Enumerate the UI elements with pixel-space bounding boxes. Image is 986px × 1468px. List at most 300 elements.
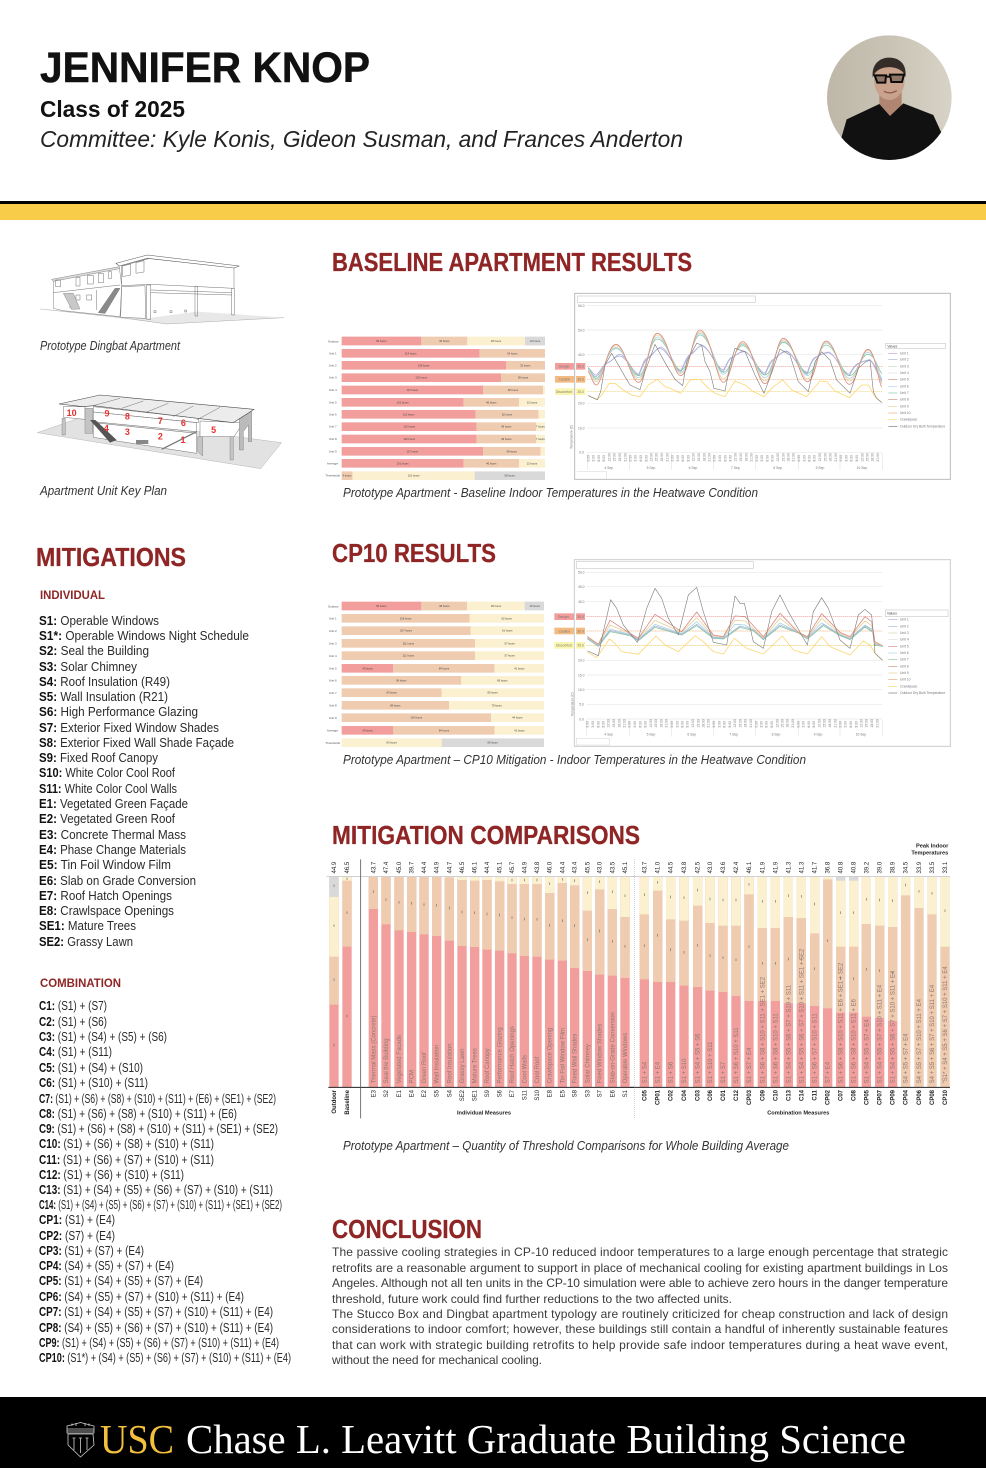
chart: CP10 hours by threshold bars: 43 hours bbox=[362, 666, 374, 670]
x axis time labels: 0:00 bbox=[586, 721, 590, 728]
unit numbers: 6 bbox=[181, 418, 186, 428]
measure combinations inside bars: "S1* + S4 + S5 + S6 + S7 + S10 + S11 + E4 bbox=[943, 966, 949, 1083]
combination codes below axis: CP01 bbox=[656, 1089, 662, 1105]
chart: baseline hours by threshold bars: 54 hours bbox=[507, 351, 518, 355]
series legend: Values bbox=[887, 344, 898, 348]
x axis time labels: 3:00 bbox=[802, 455, 806, 462]
chart: baseline hours by threshold bars: 16 hours bbox=[530, 339, 541, 343]
chart: CP10 hours by threshold bars: 38 hours bbox=[439, 604, 450, 608]
x axis time labels: 6:00 bbox=[723, 455, 727, 462]
peak indoor temperature values: 43.0 bbox=[708, 861, 714, 873]
chart: CP10 hours by threshold bars: Unit 6 bbox=[329, 679, 337, 683]
peak indoor temperature values: 45.1 bbox=[498, 861, 504, 873]
chart: baseline hours by threshold bars: 46 hours bbox=[486, 461, 497, 465]
chart: CP10 hours by threshold bars: 85 hours bbox=[487, 741, 499, 745]
chart: CP10 hours by threshold bars: 84 hours bbox=[439, 728, 450, 732]
y axis labels: 40.0 bbox=[578, 353, 585, 357]
combination codes below axis: C01 bbox=[721, 1089, 727, 1101]
x axis time labels: 15:00 bbox=[696, 719, 700, 728]
series legend: Unit 1 bbox=[900, 351, 909, 355]
combination codes below axis: C14 bbox=[799, 1089, 805, 1101]
peak indoor temperature values: 44.4 bbox=[422, 861, 428, 873]
series legend: Crawlspace bbox=[900, 684, 918, 688]
x axis time labels: 9:00 bbox=[771, 455, 775, 462]
x axis time labels: 9 Sep bbox=[814, 732, 823, 736]
bar codes below axis: Baseline bbox=[345, 1089, 351, 1115]
list: combination mitigations: CP9: (S1) + (S4) + (S5) + (S6) + (S7) + (S10) + (S11) + (E4) bbox=[39, 1336, 279, 1350]
x axis time labels: 21:00 bbox=[623, 453, 627, 462]
measure combinations inside bars: S4 + S5 + S6 + S7 + S10 + S11 + E4 bbox=[930, 984, 936, 1083]
chart: baseline hours by threshold bars: 112 hours bbox=[404, 425, 416, 429]
chart: baseline hours by threshold bars: 136 hours bbox=[418, 363, 430, 367]
x axis time labels: 4 Sep bbox=[604, 732, 613, 736]
y axis labels: 60.0 bbox=[578, 304, 585, 308]
list: individual mitigations: S9: Fixed Roof Canopy bbox=[39, 751, 159, 765]
x axis time labels: 12:00 bbox=[860, 453, 864, 462]
x axis time labels: 9:00 bbox=[854, 721, 858, 728]
x axis time labels: 0:00 bbox=[586, 455, 590, 462]
chart: CP10 hours by threshold bars: Unit 9 bbox=[329, 716, 337, 720]
x axis time labels: 9:00 bbox=[686, 721, 690, 728]
chart: CP10 hours by threshold bars: Unit 1 bbox=[329, 617, 337, 621]
heading: CP10 results: CP10 RESULTS bbox=[332, 538, 496, 568]
series legend: Unit 3 bbox=[900, 364, 909, 368]
x axis time labels: 6 Sep bbox=[689, 466, 698, 470]
x axis time labels: 6:00 bbox=[596, 721, 600, 728]
x axis time labels: 0:00 bbox=[671, 455, 675, 462]
measure names inside bars: Cool Roof bbox=[535, 1056, 541, 1083]
y axis labels: 10.0 bbox=[578, 426, 585, 430]
threshold legend boxes: 25.0 bbox=[577, 390, 584, 394]
x axis time labels: 6:00 bbox=[807, 721, 811, 728]
combination codes below axis: CP07 bbox=[878, 1089, 884, 1105]
y axis labels: 15.0 bbox=[578, 673, 585, 677]
x axis time labels: 12:00 bbox=[818, 453, 822, 462]
peak indoor temperature values: 44.4 bbox=[485, 861, 491, 873]
list: combination mitigations: CP6: (S4) + (S5) + (S7) + (S10) + (S11) + (E4) bbox=[39, 1290, 244, 1304]
measure names inside bars bbox=[371, 1012, 629, 1083]
chart: CP10 hours by threshold bars: 41 hours bbox=[514, 728, 525, 732]
measure names inside bars: Roof Insulation bbox=[447, 1043, 453, 1083]
x axis time labels: 12:00 bbox=[692, 453, 696, 462]
series legend: Unit 8 bbox=[900, 664, 909, 668]
series legend: Unit 2 bbox=[900, 624, 909, 628]
bar codes below axis: E5 bbox=[560, 1089, 566, 1097]
threshold lines bbox=[587, 616, 882, 646]
bar codes below axis: E7 bbox=[510, 1089, 516, 1097]
list: individual mitigations: S5: Wall Insulation (R21) bbox=[39, 690, 168, 704]
threshold legend boxes: 30.0 bbox=[577, 629, 584, 633]
text block: conclusion bbox=[331, 1245, 948, 1367]
x axis time labels: 6:00 bbox=[765, 455, 769, 462]
text block: conclusion: The Stucco Box and Dingbat apartment typology are routinely criticized for cheap construction and lack of design bbox=[332, 1307, 948, 1321]
x axis time labels: 18:00 bbox=[744, 719, 748, 728]
y axis labels: 40.0 bbox=[578, 600, 585, 604]
chart: CP10 hours by threshold bars: Unit 4 bbox=[329, 654, 337, 658]
peak indoor temperature values bbox=[642, 861, 949, 873]
threshold legend boxes: Danger bbox=[559, 365, 570, 369]
x axis time labels: 0:00 bbox=[628, 721, 632, 728]
combination codes below axis: C04 bbox=[682, 1089, 688, 1101]
combination codes below axis: CP05 bbox=[864, 1089, 870, 1105]
x axis time labels: 18:00 bbox=[786, 719, 790, 728]
axis group title: combination measures: Combination Measures bbox=[767, 1110, 829, 1116]
x axis time labels: 9:00 bbox=[812, 721, 816, 728]
x axis time labels bbox=[586, 453, 882, 470]
chart: CP10 hours by threshold bars: 111 hours bbox=[403, 654, 415, 658]
text block: conclusion: retrofits are a reasonable argument to support in place of mechanical cooling for existing apartment buildings in Los bbox=[332, 1261, 948, 1275]
bar codes below axis: E3 bbox=[371, 1089, 377, 1097]
chart: CP10 hours by threshold bars: 41 hours bbox=[514, 666, 525, 670]
x axis time labels: 5 Sep bbox=[647, 732, 656, 736]
unit numbers: 10 bbox=[67, 408, 77, 418]
x axis time labels: 6:00 bbox=[808, 455, 812, 462]
list: combination mitigations: C10: (S1) + (S6) + (S8) + (S10) + (S11) bbox=[39, 1137, 214, 1151]
list: combination mitigations: C7: (S1) + (S6) + (S8) + (S10) + (S11) + (E6) + (SE1) + (SE2) bbox=[39, 1092, 276, 1106]
combination codes below axis: C05 bbox=[642, 1089, 648, 1101]
subheading: combination: COMBINATION bbox=[40, 976, 121, 990]
list: combination mitigations bbox=[39, 999, 291, 1365]
chart: CP10 hours by threshold bars: 83 hours bbox=[386, 741, 398, 745]
text block: conclusion: threshold, future work could find further reductions to the two affected units. bbox=[332, 1292, 732, 1306]
threshold legend boxes: 35.0 bbox=[577, 615, 584, 619]
peak indoor temperature values: 42.5 bbox=[696, 861, 702, 873]
chart: CP10 hours by threshold bars: 83 hours bbox=[386, 691, 398, 695]
series legend: Unit 8 bbox=[900, 398, 909, 402]
threshold legend boxes: Discomfort bbox=[556, 644, 572, 648]
combination codes below axis: CP09 bbox=[891, 1089, 897, 1105]
list: individual mitigations: E7: Roof Hatch Openings bbox=[39, 889, 172, 903]
y axis labels bbox=[570, 571, 585, 721]
series legend: Unit 10 bbox=[900, 678, 911, 682]
peak indoor temperature values: 45.5 bbox=[585, 861, 591, 873]
list: combination mitigations: C8: (S1) + (S6) + (S8) + (S10) + (S11) + (E6) bbox=[39, 1107, 237, 1121]
chart: CP10 hours by threshold bars: 16 hours bbox=[529, 604, 541, 608]
bar codes below axis: E8 bbox=[548, 1089, 554, 1097]
series legend: Unit 5 bbox=[900, 378, 909, 382]
x axis time labels: 12:00 bbox=[776, 453, 780, 462]
x axis time labels: 12:00 bbox=[817, 719, 821, 728]
combination codes below axis: C13 bbox=[786, 1089, 792, 1101]
x axis time labels: 10 Sep bbox=[857, 466, 867, 470]
combination codes below axis: C03 bbox=[696, 1089, 702, 1101]
x axis time labels: 21:00 bbox=[833, 719, 837, 728]
bar codes below axis: S6 bbox=[498, 1089, 504, 1097]
measure combinations inside bars: S1 + S6 bbox=[669, 1061, 675, 1083]
y axis labels: 20.0 bbox=[578, 659, 585, 663]
x axis time labels: 12:00 bbox=[607, 719, 611, 728]
combination codes below axis: CP06 bbox=[917, 1089, 923, 1105]
peak indoor temperature values: 43.5 bbox=[610, 861, 616, 873]
unit numbers: 9 bbox=[104, 409, 109, 419]
text block: conclusion: that can work with strategic building retrofits to help provide safe indoor temperatures during a heat wave event, bbox=[332, 1338, 948, 1352]
peak indoor temperature values: 38.9 bbox=[891, 861, 897, 873]
x axis time labels: 7 Sep bbox=[731, 466, 740, 470]
x axis time labels: 18:00 bbox=[870, 719, 874, 728]
chart: CP10 hours by threshold bars: 124 hours bbox=[410, 716, 423, 720]
combination codes below axis: C06 bbox=[708, 1089, 714, 1101]
heading: mitigation comparisons: MITIGATION COMPARISONS bbox=[332, 820, 640, 850]
icon: USC shield bbox=[67, 1422, 94, 1457]
x axis time labels: 15:00 bbox=[823, 719, 827, 728]
series legend: Unit 9 bbox=[900, 404, 909, 408]
list: individual mitigations: S3: Solar Chimney bbox=[39, 660, 138, 674]
chart: baseline hours by threshold bars: 48 hours bbox=[506, 449, 518, 453]
chart: CP10 hours by threshold bars: Unit 5 bbox=[329, 666, 337, 670]
y axis labels: Temperature (C) bbox=[570, 692, 574, 716]
x axis time labels: 21:00 bbox=[875, 719, 879, 728]
x axis time labels: 15:00 bbox=[865, 453, 869, 462]
x axis time labels: 21:00 bbox=[791, 719, 795, 728]
list: combination mitigations: CP5: (S1) + (S4) + (S5) + (S7) + (E4) bbox=[39, 1274, 203, 1288]
chart: baseline hours by threshold bars: Unit 1 bbox=[329, 351, 337, 355]
x axis time labels: 18:00 bbox=[871, 453, 875, 462]
series legend: Crawlspace bbox=[900, 418, 918, 422]
x axis time labels: 3:00 bbox=[634, 455, 638, 462]
x axis time labels: 15:00 bbox=[738, 719, 742, 728]
x axis time labels bbox=[586, 719, 882, 737]
measure combinations inside bars: S1 + S4 + S5 + S6 bbox=[696, 1033, 702, 1083]
y axis labels: 50.0 bbox=[578, 571, 585, 575]
x axis time labels: 9:00 bbox=[644, 455, 648, 462]
series legend: Values bbox=[887, 612, 897, 616]
peak indoor temperature values: 40.8 bbox=[839, 861, 845, 873]
x axis time labels: 9:00 bbox=[602, 455, 606, 462]
chart: baseline hours by threshold bars: 49 hours bbox=[501, 425, 512, 429]
list: individual mitigations bbox=[39, 614, 249, 949]
chart: baseline hours by threshold bars: Unit 4 bbox=[329, 388, 337, 392]
x axis time labels: 6:00 bbox=[681, 455, 685, 462]
chart: CP10 hours by threshold bars: 48 hours bbox=[491, 604, 502, 608]
stacked bars: outdoor, baseline and individual measures bbox=[329, 877, 630, 1087]
caption: key plan: Apartment Unit Key Plan bbox=[39, 484, 167, 498]
peak indoor temperature values: 39.2 bbox=[864, 861, 870, 873]
measure combinations inside bars: S4 + S5 + S7 + S10 + S11 + E4 bbox=[917, 998, 923, 1083]
bar codes below axis: E2 bbox=[422, 1089, 428, 1097]
x axis time labels: 9:00 bbox=[601, 721, 605, 728]
measure names inside bars: Cool Walls bbox=[522, 1055, 528, 1083]
list: combination mitigations: CP2: (S7) + (E4) bbox=[39, 1229, 115, 1243]
x axis time labels: 15:00 bbox=[697, 453, 701, 462]
x axis time labels: 6:00 bbox=[639, 455, 643, 462]
temperature curves bbox=[588, 330, 882, 402]
series legend bbox=[886, 343, 946, 428]
measure names inside bars: Grassy Lawn bbox=[460, 1048, 466, 1083]
bar codes below axis: S10 bbox=[535, 1089, 541, 1101]
x axis time labels: 15:00 bbox=[781, 719, 785, 728]
threshold legend boxes: 30.0 bbox=[577, 378, 584, 382]
x axis time labels: 9:00 bbox=[728, 721, 732, 728]
x axis time labels: 3:00 bbox=[802, 721, 806, 728]
x axis time labels: 9:00 bbox=[644, 721, 648, 728]
bar codes below axis: E4 bbox=[410, 1089, 416, 1097]
chart: CP10 hours by threshold bars: 89 hours bbox=[390, 703, 401, 707]
peak indoor temperature values: 46.1 bbox=[747, 861, 753, 873]
threshold legend boxes: 35.0 bbox=[577, 365, 584, 369]
x axis time labels: 21:00 bbox=[665, 453, 669, 462]
peak indoor temperature values: 46.1 bbox=[473, 861, 479, 873]
measure names inside bars: Slab-on-Grade Conversion bbox=[610, 1012, 616, 1083]
x axis time labels: 3:00 bbox=[591, 721, 595, 728]
measure combinations inside bars: S1 + S4 + S5 + S7 + S10 + S11 + E4 bbox=[878, 984, 884, 1083]
list: combination mitigations: C3: (S1) + (S4) + (S5) + (S6) bbox=[39, 1030, 167, 1044]
x axis time labels: 21:00 bbox=[792, 453, 796, 462]
list: individual mitigations: E2: Vegetated Green Roof bbox=[39, 812, 175, 826]
chart: CP10 hours by threshold bars: 43 hours bbox=[362, 728, 374, 732]
x axis time labels: 12:00 bbox=[607, 453, 611, 462]
chart: baseline hours by threshold bars: 46 hours bbox=[486, 400, 497, 404]
list: individual mitigations: E1: Vegetated Green Façade bbox=[39, 797, 188, 811]
stacked bars: combination measures bbox=[640, 877, 950, 1087]
measure names inside bars: Thermal Mass (Concrete) bbox=[371, 1015, 377, 1083]
list: combination mitigations: C13: (S1) + (S4) + (S5) + (S6) + (S7) + (S10) + (S11) bbox=[39, 1183, 273, 1197]
x axis time labels: 10 Sep bbox=[856, 732, 866, 736]
series legend: Unit 7 bbox=[900, 391, 909, 395]
chart: CP10 hours by threshold bars: 69 hours bbox=[497, 678, 508, 682]
chart note: peak indoor temperatures bbox=[911, 844, 949, 857]
measure names inside bars: Wall Insulation bbox=[435, 1045, 441, 1083]
measure names inside bars: Mature Trees bbox=[473, 1048, 479, 1083]
peak indoor temperature values: 41.9 bbox=[773, 861, 779, 873]
measure names inside bars: PCM bbox=[410, 1070, 416, 1083]
peak indoor temperature values: 41.3 bbox=[799, 861, 805, 873]
peak indoor temperature values: 33.9 bbox=[917, 861, 923, 873]
illustration: apartment unit key plan bbox=[37, 395, 282, 469]
measure combinations inside bars: S1 + S6 + S7 + S10 + S11 bbox=[813, 1013, 819, 1083]
chart: baseline hours by threshold bars: 36 hours bbox=[518, 376, 529, 380]
text block: conclusion: considerations to indoor comfort; however, these buildings still contain a handful of inherently sustainable features bbox=[332, 1322, 948, 1336]
measure combinations inside bars: S1 + S6 + S8 + S10 + S11 bbox=[773, 1013, 779, 1083]
measure names inside bars: Green Roof bbox=[422, 1052, 428, 1083]
x axis time labels: 8 Sep bbox=[773, 466, 782, 470]
list: individual mitigations: SE2: Grassy Lawn bbox=[39, 935, 133, 949]
series legend: Outdoor Dry Bulb Temperature bbox=[900, 691, 945, 695]
peak indoor temperature values: 43.8 bbox=[682, 861, 688, 873]
chart: baseline hours by threshold bars: 112 hours bbox=[404, 437, 416, 441]
y axis labels: 0.0 bbox=[579, 717, 584, 721]
x axis time labels: 12:00 bbox=[650, 453, 654, 462]
x axis time labels: 12:00 bbox=[775, 719, 779, 728]
chart: baseline hours by threshold bars: 7 hours bbox=[536, 425, 545, 429]
measure names inside bars: Fixed Window Shades bbox=[598, 1024, 604, 1083]
x axis time labels: 15:00 bbox=[655, 453, 659, 462]
unit numbers: 4 bbox=[104, 424, 109, 434]
chart: baseline hours by threshold bars: 21 hours bbox=[527, 400, 538, 404]
header: name and committee bbox=[40, 44, 683, 152]
unit numbers: 2 bbox=[158, 432, 163, 442]
peak indoor temperature values: 43.6 bbox=[721, 861, 727, 873]
x axis time labels: 12:00 bbox=[691, 719, 695, 728]
temperature curves bbox=[588, 587, 882, 660]
chart: CP10 hours by threshold bars: 85 hours bbox=[487, 691, 499, 695]
heading: mitigations: MITIGATIONS bbox=[36, 542, 186, 572]
peak indoor temperature values: 44.4 bbox=[560, 861, 566, 873]
x axis time labels: 15:00 bbox=[781, 453, 785, 462]
peak indoor temperature values: 43.7 bbox=[371, 861, 377, 873]
bar codes below axis: S4 bbox=[447, 1089, 453, 1097]
measure combinations inside bars: S1 + S6 + S8 + S10 + S11 + E6 bbox=[852, 998, 858, 1083]
x axis time labels: 21:00 bbox=[623, 719, 627, 728]
y axis labels: 10.0 bbox=[578, 688, 585, 692]
measure combinations inside bars: S1 + E4 bbox=[656, 1061, 662, 1083]
x axis time labels: 3:00 bbox=[676, 455, 680, 462]
chart: CP10 hours by threshold bars: 66 hours bbox=[376, 604, 387, 608]
text block: conclusion: without the need for mechanical cooling. bbox=[331, 1353, 542, 1367]
x axis time labels: 5 Sep bbox=[647, 466, 656, 470]
x axis time labels: 3:00 bbox=[718, 455, 722, 462]
list: combination mitigations: CP3: (S1) + (S7) + (E4) bbox=[39, 1244, 144, 1258]
list: combination mitigations: C9: (S1) + (S6) + (S8) + (S10) + (S11) + (SE1) + (SE2) bbox=[39, 1122, 278, 1136]
combination codes below axis: CP03 bbox=[747, 1089, 753, 1105]
y axis labels bbox=[569, 304, 585, 455]
x axis time labels: 0:00 bbox=[670, 721, 674, 728]
list: combination mitigations: CP8: (S4) + (S5) + (S6) + (S7) + (S10) + (S11) + (E4) bbox=[39, 1321, 273, 1335]
series legend: Unit 6 bbox=[900, 651, 909, 655]
peak indoor temperature values: 46.0 bbox=[548, 861, 554, 873]
x axis time labels: 6:00 bbox=[638, 721, 642, 728]
chart: baseline hours by threshold bars: Unit 3 bbox=[329, 376, 337, 380]
list: individual mitigations: S8: Exterior Fixed Wall Shade Façade bbox=[39, 736, 234, 750]
peak indoor temperature values: 44.9 bbox=[522, 861, 528, 873]
threshold legend boxes: Caution bbox=[559, 629, 570, 633]
measure combinations inside bars: S4 + S5 + S7 + E4 bbox=[904, 1033, 910, 1083]
header divider band bbox=[0, 201, 986, 220]
chart: baseline hours by threshold bars: 7 hours bbox=[536, 437, 545, 441]
peak indoor temperature values: 44.7 bbox=[447, 861, 453, 873]
bar codes below axis: S7 bbox=[598, 1089, 604, 1097]
x axis time labels: 6:00 bbox=[723, 721, 727, 728]
measure names inside bars: Solar Chimney bbox=[585, 1044, 591, 1083]
subheading: individual: INDIVIDUAL bbox=[40, 588, 105, 602]
chart: CP10 hours by threshold bars: 61 hours bbox=[502, 629, 513, 633]
series legend: Unit 2 bbox=[900, 358, 909, 362]
chart: CP10 hours by threshold bars: 107 hours bbox=[400, 629, 413, 633]
x axis time labels: 15:00 bbox=[613, 453, 617, 462]
list: individual mitigations: S4: Roof Insulation (R49) bbox=[39, 675, 170, 689]
chart note: peak indoor temperatures: Temperatures bbox=[911, 851, 948, 857]
x axis time labels: 7 Sep bbox=[729, 732, 738, 736]
x axis time labels: 0:00 bbox=[838, 721, 842, 728]
chart: CP10 hours by threshold bars: 111 hours bbox=[403, 641, 415, 645]
bar codes below axis: SE2 bbox=[460, 1089, 466, 1101]
chart: CP10 hours by threshold bars: 79 hours bbox=[491, 703, 503, 707]
threshold lines bbox=[587, 366, 882, 391]
peak indoor temperature values: 39.0 bbox=[878, 861, 884, 873]
x axis time labels: 21:00 bbox=[707, 719, 711, 728]
peak indoor temperature values: 42.4 bbox=[734, 861, 740, 873]
x axis time labels: 9:00 bbox=[770, 721, 774, 728]
chart: baseline hours by threshold bars: Unit 7 bbox=[329, 425, 337, 429]
text block: conclusion: The passive cooling strategies in CP-10 reduced indoor temperatures to a large enough percentage that strategic bbox=[332, 1245, 948, 1259]
list: combination mitigations: CP10: (S1*) + (S4) + (S5) + (S6) + (S7) + (S10) + (S11) + (E4) bbox=[39, 1351, 291, 1365]
x axis time labels: 0:00 bbox=[754, 721, 758, 728]
chart: baseline hours by threshold bars: 48 hours bbox=[491, 339, 502, 343]
x axis time labels: 21:00 bbox=[665, 719, 669, 728]
threshold legend boxes bbox=[554, 613, 585, 649]
peak indoor temperature values: 34.5 bbox=[904, 861, 910, 873]
chart: CP10 hours by threshold bars bbox=[325, 602, 544, 747]
threshold legend boxes: Caution bbox=[559, 378, 570, 382]
chart: CP10 hours by threshold bars: 44 hours bbox=[512, 716, 523, 720]
threshold legend boxes: 25.0 bbox=[577, 644, 584, 648]
caption: baseline temperatures: Prototype Apartment - Baseline Indoor Temperatures in the Heatwave Condition bbox=[343, 486, 758, 500]
chart: CP10 hours by threshold bars: Unit 3 bbox=[329, 642, 337, 646]
x axis time labels: 9 Sep bbox=[816, 466, 825, 470]
x axis time labels: 0:00 bbox=[797, 455, 801, 462]
x axis time labels: 15:00 bbox=[823, 453, 827, 462]
measure combinations inside bars bbox=[642, 948, 949, 1083]
x axis time labels: 18:00 bbox=[828, 719, 832, 728]
